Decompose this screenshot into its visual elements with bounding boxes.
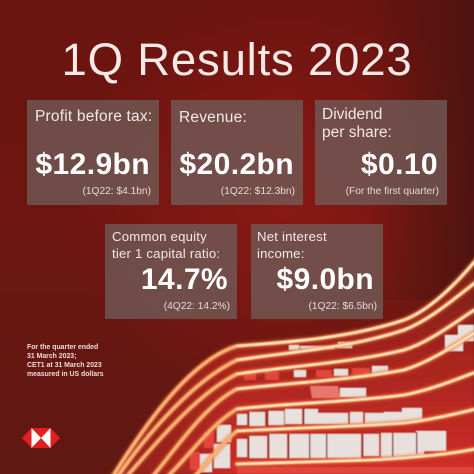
- label: CET1 ratio: tier 1 capital ratio:: [112, 246, 220, 260]
- value: dividend: $0.10: [361, 148, 438, 181]
- value: CET1 ratio: 14.7%: [141, 263, 228, 296]
- comparison: CET1 ratio: (4Q22: 14.2%): [164, 301, 230, 312]
- label: dividend per share: Dividend: [322, 106, 382, 123]
- footnote: For the quarter ended: [27, 344, 98, 351]
- footnote: 31 March 2023;: [27, 353, 76, 360]
- panel: net interest income: [251, 224, 383, 319]
- value: net interest income: $9.0bn: [277, 263, 374, 296]
- panel: revenue: [171, 100, 303, 205]
- label: net interest income: income:: [257, 246, 305, 260]
- title: 1Q Results 2023: [62, 34, 412, 85]
- panel: profit before tax: [27, 100, 159, 205]
- label: CET1 ratio: Common equity: [112, 229, 207, 244]
- panel: CET1 ratio: [105, 224, 237, 319]
- icon: HSBC hexagon logo: [22, 428, 60, 448]
- comparison: revenue: (1Q22: $12.3bn): [221, 186, 295, 197]
- label: dividend per share: [322, 106, 392, 141]
- label: profit before tax: Profit before tax:: [35, 108, 152, 125]
- footnote: [27, 344, 104, 378]
- footnote: CET1 at 31 March 2023: [27, 362, 102, 369]
- comparison: profit: (1Q22: $4.1bn): [82, 186, 151, 197]
- label: net interest income: [257, 229, 327, 260]
- label: net interest income: Net interest: [257, 229, 327, 244]
- footnote: measured in US dollars: [27, 371, 104, 378]
- value: revenue: $20.2bn: [179, 148, 294, 181]
- comparison: dividend: (For the first quarter): [346, 186, 439, 197]
- panel: dividend per share: [315, 100, 447, 205]
- label: CET1 ratio: [112, 229, 220, 260]
- label: dividend per share: per share:: [322, 124, 392, 141]
- label: revenue: Revenue:: [179, 109, 247, 126]
- comparison: net interest income: (1Q22: $6.5bn): [308, 301, 377, 312]
- value: profit: $12.9bn: [35, 148, 150, 181]
